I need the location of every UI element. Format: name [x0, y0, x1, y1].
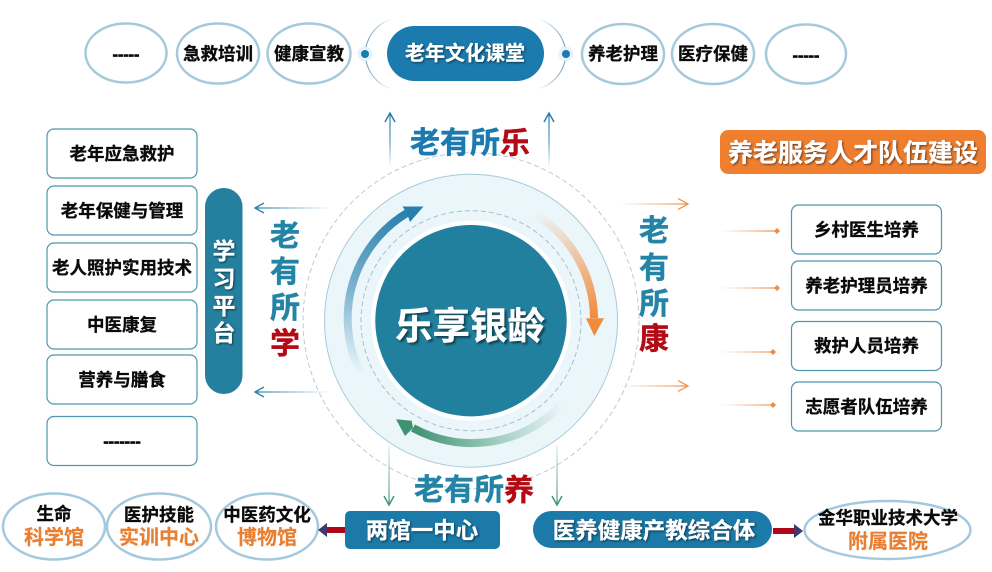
venue: 生命科学馆: 科学馆 [24, 526, 84, 549]
label: 医养健康产教综合体 [533, 511, 772, 548]
box: 老年应急救护 [47, 129, 197, 178]
box: 老年应急救护: 老年应急救护 [70, 144, 174, 164]
pill: 学习平台: 平 [212, 293, 236, 319]
connector arrows up: 老有所乐 [385, 113, 554, 168]
white halo [371, 221, 571, 421]
heading: 老有所学: 所 [270, 292, 300, 325]
topic: placeholder left: ----- [113, 46, 139, 63]
top row: 老年文化课堂 topics [86, 19, 846, 89]
connector arrows right [620, 198, 688, 392]
venue: 中医药文化博物馆: 中医药文化 [223, 505, 311, 525]
heading: 老有所康: 所 [639, 288, 669, 321]
topic: 养老护理: 养老护理 [588, 44, 658, 64]
ellipse: 金华职业技术大学附属医院: 金华职业技术大学 [818, 508, 958, 528]
venue: 医护技能实训中心 [107, 494, 211, 560]
bracket: right of heading pill [538, 19, 574, 89]
heading: 老有所康: 康 [639, 323, 669, 356]
topic: placeholder right [766, 24, 846, 84]
topic: 急救培训 [177, 24, 259, 84]
header: 养老服务人才队伍建设 [720, 130, 986, 174]
heading: 老有所学: 学 [270, 328, 300, 361]
right panel: talent training [792, 205, 942, 431]
heading: 老有所学: 有 [270, 256, 300, 289]
heading: 老有所学: 老 [270, 220, 300, 253]
venue: 医护技能实训中心: 实训中心 [119, 525, 199, 549]
central circle diagram [303, 153, 639, 489]
arrow: green arc [396, 403, 563, 443]
heading: 老有所康 [639, 215, 669, 356]
pill: 学习平台: 学 [212, 238, 236, 264]
box: 老人照护实用技术: 老人照护实用技术 [52, 258, 192, 278]
box: 中医康复 [47, 300, 197, 349]
center title: 乐享银龄 [395, 305, 545, 347]
inner dashed ring [361, 211, 581, 431]
left panel: course list [47, 129, 197, 466]
pill: 学习平台 [205, 188, 242, 394]
small connector lines with diamonds [720, 228, 780, 408]
connector arrows left [255, 203, 330, 397]
label: 医养健康产教综合体: 医养健康产教综合体 [553, 518, 756, 544]
light disc [324, 174, 618, 467]
topic: 健康宣教: 健康宣教 [274, 44, 344, 64]
heading pill: 老年文化课堂: 老年文化课堂 [405, 41, 525, 65]
box: 志愿者队伍培养: 志愿者队伍培养 [805, 397, 928, 417]
ellipse: 金华职业技术大学附属医院: 附属医院 [848, 529, 928, 553]
topic: placeholder right: ----- [793, 47, 819, 64]
box: 养老护理员培养 [792, 261, 942, 310]
venue: 医护技能实训中心: 医护技能 [124, 505, 194, 525]
venue: 生命科学馆: 生命 [36, 504, 72, 524]
box: 养老护理员培养: 养老护理员培养 [805, 276, 928, 296]
bracket: left of heading pill [358, 19, 392, 89]
box: 老人照护实用技术 [47, 243, 197, 292]
heading: 老有所康: 老 [639, 215, 669, 248]
box: 中医康复: 中医康复 [87, 315, 157, 335]
arrow: orange arc [533, 213, 604, 336]
box: 救护人员培养 [792, 322, 942, 370]
box: 老年保健与管理: 老年保健与管理 [61, 201, 184, 221]
bottom left ellipses [3, 494, 318, 560]
topic: 养老护理 [582, 24, 664, 84]
pill: 学习平台: 习 [212, 266, 236, 292]
heading: 老有所学 [270, 220, 300, 361]
box: 救护人员培养: 救护人员培养 [814, 336, 919, 356]
heading pill: 老年文化课堂 [387, 26, 544, 81]
box: 乡村医生培养 [792, 205, 942, 254]
topic: 医疗保健 [672, 24, 754, 84]
arrow: blue arc [348, 206, 424, 374]
topic: placeholder left [86, 24, 166, 82]
core circle [375, 225, 567, 416]
box: 营养与膳食: 营养与膳食 [78, 370, 166, 390]
arrow: to venues [318, 523, 347, 537]
box: 营养与膳食 [47, 355, 197, 404]
venue: 生命科学馆 [3, 494, 105, 560]
topic: 健康宣教 [268, 24, 350, 84]
heading: 老有所乐: 老有所乐 [410, 127, 530, 160]
topic: 医疗保健: 医疗保健 [678, 44, 748, 64]
box: 乡村医生培养: 乡村医生培养 [814, 220, 919, 240]
venue: 中医药文化博物馆: 博物馆 [237, 526, 297, 549]
outer dashed ring [303, 153, 639, 489]
ellipse: 金华职业技术大学附属医院 [804, 501, 970, 559]
label: 两馆一中心: 两馆一中心 [366, 519, 479, 544]
venue: 中医药文化博物馆 [216, 494, 318, 560]
heading: 老有所养: 老有所养 [414, 474, 534, 507]
box: 志愿者队伍培养 [792, 382, 942, 431]
heading: 老有所康: 有 [639, 252, 669, 285]
header: 养老服务人才队伍建设: 养老服务人才队伍建设 [728, 139, 978, 167]
topic: 急救培训: 急救培训 [183, 44, 253, 64]
label: 两馆一中心 [345, 511, 500, 549]
arrow: to hospital [773, 524, 803, 538]
box: 老年保健与管理 [47, 186, 197, 235]
connector arrows down [384, 445, 562, 505]
pill: 学习平台: 台 [212, 320, 236, 346]
box: placeholder [47, 416, 197, 466]
box: placeholder: ------- [103, 433, 141, 450]
